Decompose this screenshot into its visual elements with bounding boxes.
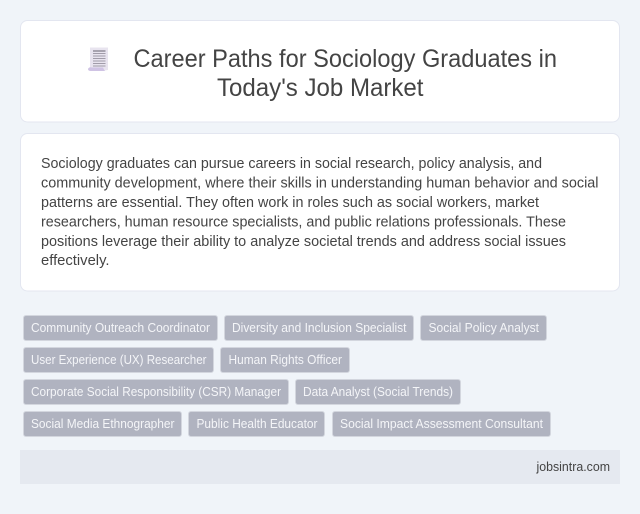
panel: description: researchers, human resource specialists, and public relations professionals. These bbox=[41, 214, 566, 230]
tag: Social Media Ethnographer: Social Media Ethnographer bbox=[31, 416, 175, 431]
tag: Human Rights Officer bbox=[220, 348, 350, 372]
title bbox=[134, 45, 557, 102]
tag: Social Media Ethnographer bbox=[24, 412, 182, 436]
tag: Data Analyst (Social Trends): Data Analyst (Social Trends) bbox=[303, 384, 453, 399]
tag: Social Policy Analyst: Social Policy Analyst bbox=[428, 320, 539, 335]
tag: Diversity and Inclusion Specialist: Diversity and Inclusion Specialist bbox=[232, 320, 407, 335]
tag: Diversity and Inclusion Specialist bbox=[224, 316, 414, 340]
footer bar bbox=[20, 450, 620, 484]
icon: document scroll bbox=[88, 48, 108, 71]
tag: Social Impact Assessment Consultant: Social Impact Assessment Consultant bbox=[340, 416, 543, 431]
tag: User Experience (UX) Researcher bbox=[24, 348, 214, 372]
panel: description: Sociology graduates can pursue careers in social research, policy analysis, and bbox=[41, 155, 542, 172]
tag: Human Rights Officer: Human Rights Officer bbox=[228, 352, 343, 367]
footer source text: jobsintra.com bbox=[536, 459, 610, 474]
tag: Community Outreach Coordinator bbox=[24, 316, 218, 340]
tag: Corporate Social Responsibility (CSR) Manager bbox=[24, 380, 288, 404]
panel: title card bbox=[20, 20, 620, 122]
title: Career Paths for Sociology Graduates in bbox=[134, 45, 557, 73]
title: Today's Job Market bbox=[217, 74, 424, 102]
tag: Corporate Social Responsibility (CSR) Manager: Corporate Social Responsibility (CSR) Manager bbox=[31, 384, 282, 399]
panel: description: positions leverage their ability to analyze societal trends and address social issues bbox=[41, 233, 566, 250]
panel: description bbox=[20, 134, 620, 291]
tag: Public Health Educator bbox=[188, 412, 324, 436]
panel: description: effectively. bbox=[41, 252, 110, 269]
tag: Social Policy Analyst bbox=[420, 316, 546, 340]
tag: Community Outreach Coordinator: Community Outreach Coordinator bbox=[31, 320, 211, 335]
panel: description: community development, where their skills in understanding human behavior and social bbox=[41, 174, 598, 192]
tag: Data Analyst (Social Trends) bbox=[296, 380, 460, 404]
tag: User Experience (UX) Researcher: User Experience (UX) Researcher bbox=[31, 352, 207, 367]
tag: Public Health Educator: Public Health Educator bbox=[196, 416, 318, 431]
panel: description: patterns are essential. They often work in roles such as social workers, market bbox=[41, 194, 540, 211]
job tags bbox=[24, 316, 550, 436]
tag: Social Impact Assessment Consultant bbox=[332, 412, 550, 436]
